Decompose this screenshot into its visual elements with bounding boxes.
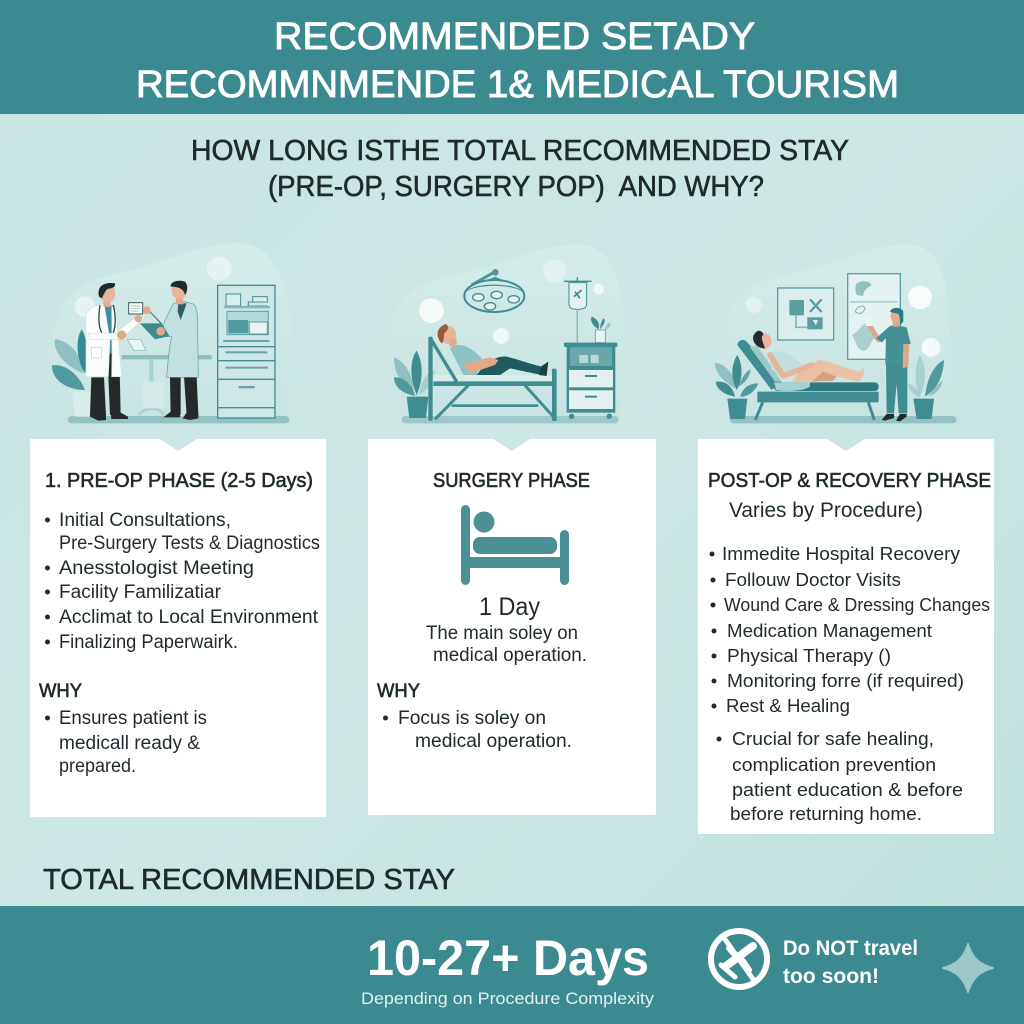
illustration: patient in surgery — [392, 244, 624, 423]
doctor in teal coat — [129, 281, 198, 420]
plant — [52, 329, 93, 417]
title banner: RECOMMNMENDE 1& MEDICAL TOURISM — [136, 64, 899, 106]
recovery task list: Medication Management — [727, 620, 932, 641]
wall chart left — [778, 288, 834, 340]
warning text: too soon! — [783, 965, 879, 988]
heading: Varies by Procedure) — [729, 499, 923, 522]
icon: no flying — [711, 931, 767, 987]
left plant — [715, 355, 758, 419]
doctor in white coat — [86, 283, 142, 421]
why text: WHY — [377, 681, 420, 702]
description: medical operation. — [433, 645, 587, 666]
recovery task list: Immedite Hospital Recovery — [722, 543, 961, 564]
description: The main soley on — [426, 623, 578, 644]
heading: SURGERY PHASE — [433, 470, 590, 492]
total days: 10-27+ Days — [367, 930, 649, 986]
question heading: (PRE-OP, SURGERY POP) AND WHY? — [268, 171, 764, 203]
why text: Crucial for safe healing, — [732, 728, 934, 749]
illustration: doctors consulting — [52, 243, 293, 423]
icon: sparkle — [943, 944, 993, 992]
why text: Focus is soley on — [398, 708, 546, 729]
illustration: post-op recovery — [715, 244, 957, 423]
why text — [377, 681, 572, 752]
why text: patient education & before — [732, 779, 963, 800]
nurse — [866, 308, 911, 421]
heading — [708, 470, 991, 522]
pre-op task list: Acclimat to Local Environment — [59, 607, 319, 628]
question heading: HOW LONG ISTHE TOTAL RECOMMENDED STAY — [191, 135, 849, 167]
why text: prepared. — [59, 756, 136, 777]
recovery task list — [710, 543, 990, 716]
potted plant — [394, 351, 435, 418]
recovery task list: Physical Therapy () — [727, 645, 891, 666]
why text: complication prevention — [732, 754, 936, 775]
footer banner — [0, 906, 1024, 1024]
bedside cabinet — [564, 343, 617, 419]
why text: WHY — [39, 681, 82, 702]
why text — [716, 728, 963, 824]
wall chart right — [848, 274, 900, 359]
pre-op task list: Finalizing Paperwairk. — [59, 632, 238, 653]
why text — [39, 681, 207, 777]
right plant — [908, 355, 944, 419]
recovery task list: Rest & Healing — [726, 695, 850, 716]
pre-op task list: Pre-Surgery Tests & Diagnostics — [59, 533, 320, 554]
IV drip — [564, 277, 592, 343]
title banner — [0, 0, 1024, 114]
question heading — [191, 135, 849, 203]
why text: medical operation. — [415, 731, 572, 752]
recovery task list: Wound Care & Dressing Changes — [724, 594, 990, 615]
surgical lamp — [464, 269, 524, 312]
icon: bed — [461, 505, 569, 585]
medical cabinet — [218, 285, 275, 418]
recovery task list: Monitoring forre (if required) — [727, 670, 964, 691]
total days: Depending on Procedure Complexity — [361, 989, 655, 1008]
warning text: Do NOT travel — [783, 937, 918, 960]
pre-op task list: Initial Consultations, — [59, 510, 231, 531]
patient — [438, 324, 548, 376]
why text: medicall ready & — [59, 733, 200, 754]
title banner: RECOMMENDED SETADY — [274, 16, 755, 58]
description — [426, 623, 587, 666]
panel: post-op and recovery phase — [698, 439, 994, 834]
panel: surgery phase — [368, 439, 656, 815]
why text: before returning home. — [730, 803, 922, 824]
pre-op task list: Facility Familizatiar — [59, 582, 222, 603]
duration: 1 Day — [479, 593, 540, 621]
plant on table — [591, 317, 611, 343]
recliner bed — [737, 340, 879, 420]
heading: POST-OP & RECOVERY PHASE — [708, 470, 991, 492]
reclining patient — [753, 331, 864, 382]
why text: Ensures patient is — [59, 708, 207, 729]
recovery task list: Follouw Doctor Visits — [725, 569, 901, 590]
warning text — [783, 937, 918, 988]
pre-op task list — [45, 510, 320, 653]
total days — [361, 930, 655, 1008]
hospital bed — [428, 337, 557, 421]
total stay heading: TOTAL RECOMMENDED STAY — [43, 864, 455, 896]
desk — [122, 339, 212, 415]
heading: 1. PRE-OP PHASE (2-5 Days) — [45, 470, 313, 492]
pre-op task list: Anesstologist Meeting — [59, 558, 254, 579]
panel: pre-op phase — [30, 439, 326, 817]
